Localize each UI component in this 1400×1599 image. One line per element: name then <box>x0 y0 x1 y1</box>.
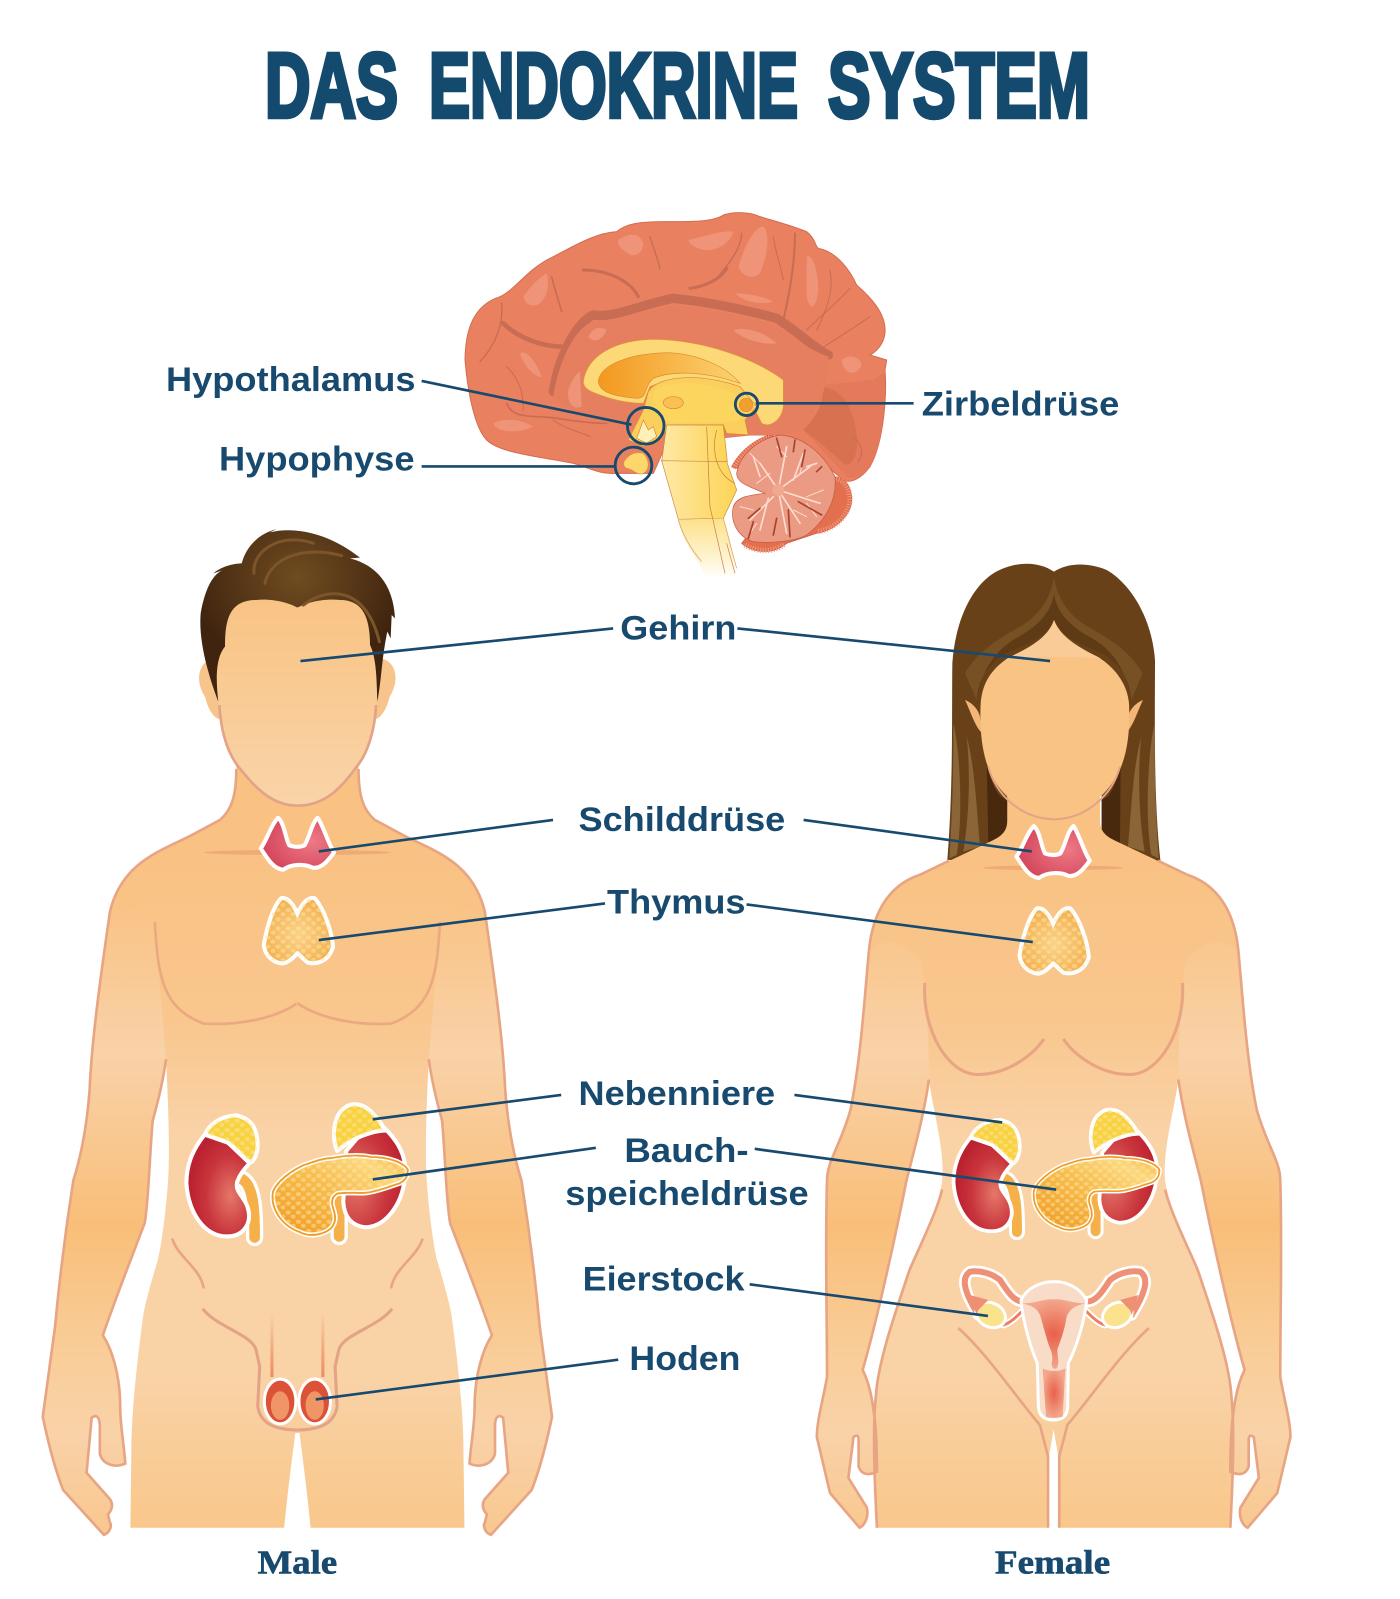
face <box>216 600 377 805</box>
brain gland circles <box>615 393 758 484</box>
right kidney <box>343 1128 405 1227</box>
face <box>980 620 1129 818</box>
left adrenal <box>205 1115 258 1162</box>
title: DAS <box>265 35 398 137</box>
labels: Nebenniere <box>579 1075 775 1113</box>
title: ENDOKRINE <box>429 35 798 137</box>
thymus male <box>264 898 333 964</box>
title: SYSTEM <box>828 35 1090 137</box>
pancreas <box>273 1156 408 1235</box>
labels: Hypophyse <box>219 441 415 479</box>
sulci <box>480 233 870 462</box>
labels: Zirbeldrüse <box>922 386 1119 424</box>
title <box>265 35 1090 137</box>
medulla <box>678 518 737 578</box>
caption: female: Female <box>995 1545 1110 1582</box>
organs: kidneys, adrenals and pancreas female <box>954 1110 1160 1232</box>
ears <box>965 700 982 733</box>
caption: male: Male <box>258 1545 337 1582</box>
labels: Hypothalamus <box>166 361 416 399</box>
labels <box>166 361 1119 1378</box>
labels: Schilddrüse <box>579 801 785 839</box>
labels: Eierstock <box>583 1260 745 1298</box>
male body <box>43 759 552 1535</box>
midbrain <box>662 425 727 462</box>
right adrenal <box>334 1104 385 1151</box>
cortex inner <box>553 305 828 443</box>
ureters <box>242 1179 255 1237</box>
left kidney <box>186 1135 250 1236</box>
pons <box>662 461 737 519</box>
ears <box>199 658 222 719</box>
corpus callosum <box>583 339 783 425</box>
female body <box>817 784 1290 1528</box>
cerebellum <box>732 435 852 551</box>
hair streaks <box>254 540 379 642</box>
thyroid male <box>261 818 334 870</box>
jaw line <box>219 705 376 806</box>
labels: Gehirn <box>620 610 736 648</box>
male head <box>199 529 396 806</box>
brain illustration <box>465 213 887 578</box>
hypophysis <box>624 453 648 474</box>
testes <box>264 1379 331 1424</box>
collarbone crease female <box>983 865 1123 870</box>
temporal lobe shade <box>803 372 885 478</box>
thymus female <box>1020 908 1089 974</box>
labels: Thymus <box>607 884 746 922</box>
female head <box>965 577 1143 819</box>
chin line <box>988 767 1120 819</box>
organs: kidneys, adrenals and pancreas male <box>186 818 1160 1237</box>
hypothalamus bits <box>637 420 657 443</box>
highlights <box>493 227 862 431</box>
callout lines <box>300 381 1056 1399</box>
labels: Bauch- <box>624 1132 749 1170</box>
labels: speicheldrüse <box>565 1175 809 1213</box>
uterus and ovaries <box>965 1271 1145 1420</box>
hair <box>200 529 395 702</box>
female back hair <box>947 564 1161 863</box>
thyroid female <box>1016 826 1090 878</box>
pineal gland <box>739 398 753 412</box>
labels: Hoden <box>629 1340 740 1378</box>
ventricle <box>598 353 740 398</box>
cerebrum <box>465 213 887 481</box>
hair front band <box>965 577 1143 700</box>
brain stem upper <box>628 378 757 447</box>
collarbone crease <box>204 850 391 855</box>
